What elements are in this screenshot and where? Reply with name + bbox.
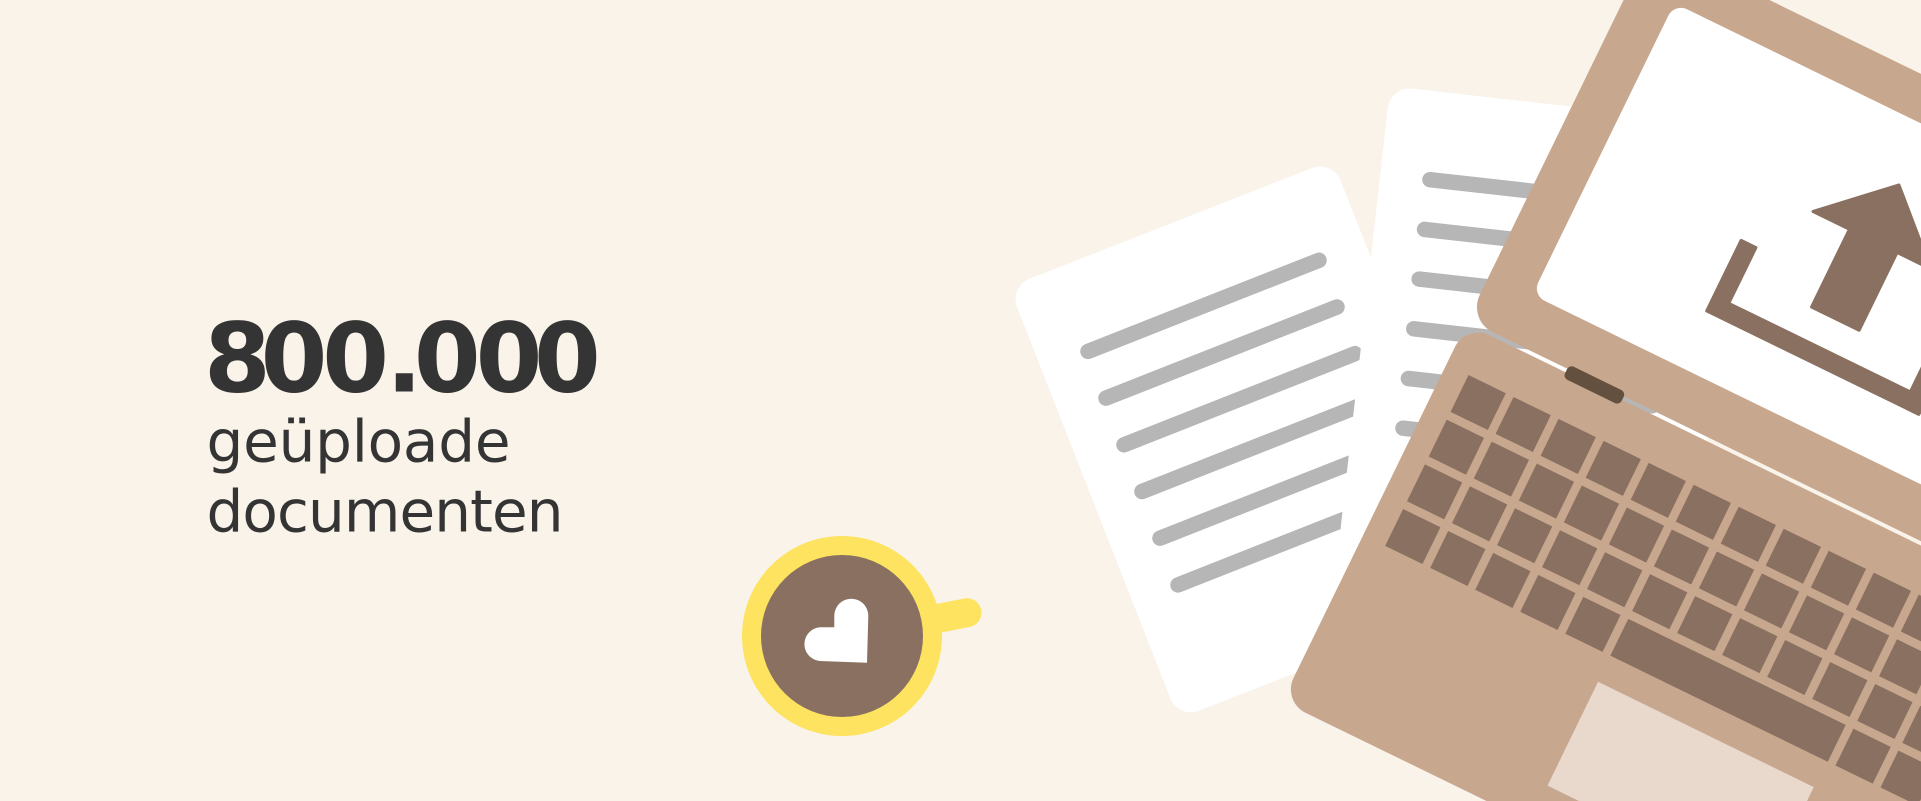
key row 4 with spacebar — [1385, 509, 1891, 784]
cup handle — [900, 613, 967, 626]
laptop base — [1291, 333, 1921, 801]
document: front sheet behind laptop — [1338, 86, 1743, 587]
headline statistic — [204, 302, 601, 546]
key rows — [1385, 375, 1921, 801]
icon: upload arrow and tray — [1707, 133, 1921, 414]
key row 3 — [1407, 464, 1921, 761]
text lines — [1088, 260, 1409, 585]
corner key at page edge — [1880, 751, 1921, 801]
label line 1: geüploade — [206, 408, 510, 476]
heart — [804, 599, 868, 663]
keyboard — [1385, 375, 1921, 801]
hinge — [1563, 365, 1626, 405]
screen — [1537, 8, 1921, 484]
text lines — [1403, 180, 1674, 455]
laptop — [1291, 0, 1921, 801]
key row 1 — [1451, 375, 1921, 650]
arrow — [1775, 156, 1921, 347]
sheet — [1338, 86, 1743, 587]
cup rim — [742, 536, 942, 736]
lid casing — [1477, 0, 1921, 541]
base casing — [1291, 333, 1921, 801]
icon: coffee cup with heart — [742, 536, 967, 736]
key row 2 — [1429, 420, 1921, 716]
trackpad — [1548, 682, 1814, 801]
document: back-left sheet — [1009, 160, 1502, 719]
sheet — [1009, 160, 1502, 719]
label line 2: documenten — [206, 478, 564, 546]
laptop lid — [1477, 0, 1921, 541]
number: 800.000: 800.000 — [204, 302, 601, 414]
coffee — [761, 555, 923, 717]
tray — [1707, 240, 1921, 414]
